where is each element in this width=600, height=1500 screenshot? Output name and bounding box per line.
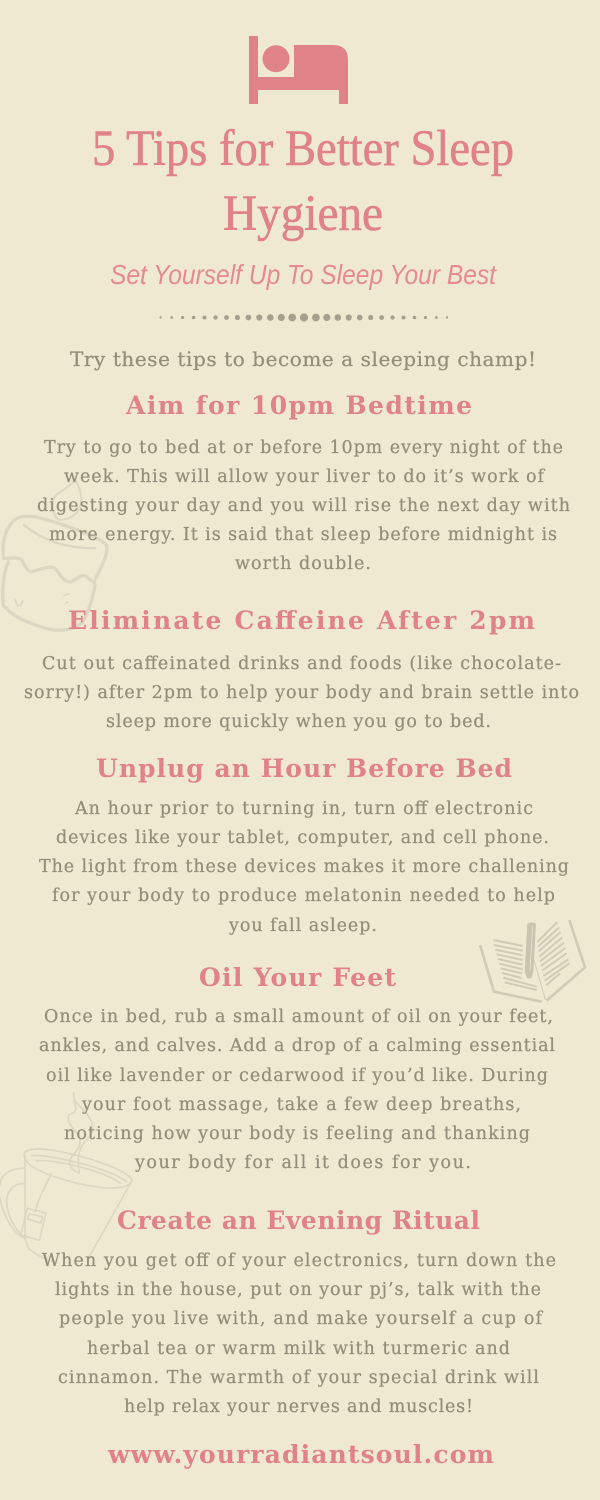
heading: tip 1: Aim for 10pm Bedtime [125,391,472,420]
title: 5 Tips for Better Sleep [92,121,514,177]
body: tip 3: The light from these devices makes it more challening [39,857,569,877]
body: tip 3: devices like your tablet, computer, and cell phone. [56,828,549,848]
body: tip 1: week. This will allow your liver to do it’s work of [64,467,546,487]
body: tip 5: people you live with, and make yourself a cup of [59,1309,544,1329]
intro line: Try these tips to become a sleeping champ! [70,347,536,371]
body: tip 1: digesting your day and you will rise the next day with [37,496,570,516]
icon: tea mug with teabag [0,1092,132,1262]
body: tip 5: herbal tea or warm milk with turmeric and [87,1339,510,1359]
heading: tip 5: Create an Evening Ritual [117,1206,480,1235]
body: tip 4: your body for all it does for you. [134,1153,471,1173]
title: Hygiene [223,186,383,242]
body: tip 3: for your body to produce melatonin needed to help [52,886,555,906]
body: tip 4: noticing how your body is feeling and thanking [64,1124,530,1144]
body: tip 4 [39,1007,555,1173]
heading: tip 3: Unplug an Hour Before Bed [96,754,512,783]
body: tip 4: ankles, and calves. Add a drop of a calming essential [39,1036,555,1056]
dotted divider [160,313,448,322]
body: tip 3: you fall asleep. [228,916,377,936]
subtitle: Set Yourself Up To Sleep Your Best [110,259,497,290]
website url: www.yourradiantsoul.com [107,1440,494,1469]
body: tip 4: Once in bed, rub a small amount of oil on your feet, [44,1007,553,1027]
heading: tip 2: Eliminate Caffeine After 2pm [68,606,535,635]
heading: tip 4: Oil Your Feet [199,963,396,992]
body: tip 2: Cut out caffeinated drinks and foods (like chocolate- [42,654,561,674]
body: tip 1: more energy. It is said that sleep before midnight is [49,525,557,545]
body: tip 5 [42,1251,556,1417]
body: tip 1: worth double. [235,554,371,574]
body: tip 4: your foot massage, take a few deep breaths, [81,1095,521,1115]
body: tip 4: oil like lavender or cedarwood if you’d like. During [46,1066,548,1086]
body: tip 5: lights in the house, put on your pj’s, talk with the [55,1280,541,1300]
panel: tip 1 [37,391,570,574]
body: tip 1 [37,438,570,574]
icon: cake slice with candle flame [3,480,107,630]
body: tip 5: cinnamon. The warmth of your special drink will [58,1368,539,1388]
title [92,121,514,242]
icon: open notebook and pen [480,920,585,1002]
icon: bed [249,36,348,104]
body: tip 1: Try to go to bed at or before 10pm every night of the [44,438,563,458]
body: tip 5: help relax your nerves and muscles! [124,1397,473,1417]
panel: tip 3 [39,754,569,936]
body: tip 3 [39,799,569,936]
panel: tip 5 [42,1206,556,1417]
body: tip 5: When you get off of your electronics, turn down the [42,1251,556,1271]
body: tip 2 [24,654,579,732]
body: tip 2: sleep more quickly when you go to bed. [106,712,491,732]
panel: tip 4 [39,963,555,1173]
body: tip 3: An hour prior to turning in, turn off electronic [74,799,533,819]
panel: tip 2 [24,606,579,732]
body: tip 2: sorry!) after 2pm to help your body and brain settle into [24,683,579,703]
